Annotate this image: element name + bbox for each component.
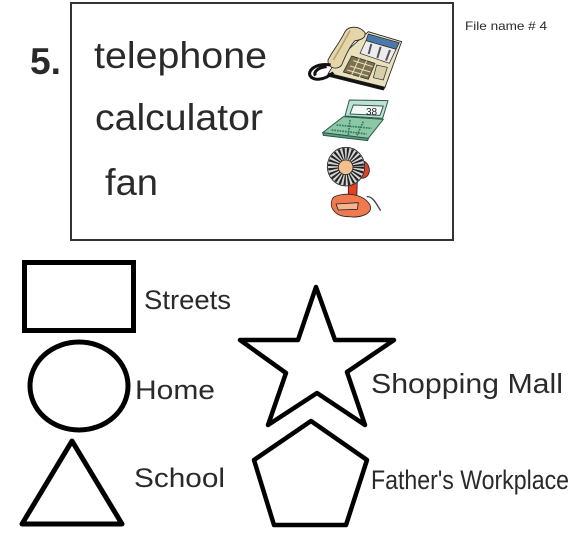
icon: calculator: 38	[366, 107, 378, 118]
shape: rectangle	[24, 262, 134, 330]
question number: 5.	[30, 41, 61, 82]
word: calculator: calculator	[95, 97, 263, 138]
word: fan: fan	[105, 162, 158, 203]
legend: father's workplace	[254, 421, 569, 525]
legend: streets	[24, 262, 231, 330]
file name note: File name # 4	[465, 19, 547, 33]
legend: school	[22, 441, 225, 524]
word: telephone: telephone	[94, 35, 267, 76]
icon: telephone	[310, 27, 402, 90]
telephone cord	[310, 65, 333, 79]
legend: home	[30, 342, 215, 430]
icon: calculator	[323, 100, 388, 141]
label: School: School	[134, 463, 225, 493]
shape: circle	[30, 342, 128, 430]
shape: triangle	[22, 441, 122, 524]
label: Home: Home	[135, 375, 215, 405]
icon: fan	[327, 147, 381, 217]
legend: shopping mall	[240, 287, 563, 425]
shape: pentagon	[254, 421, 367, 525]
label: Streets: Streets	[144, 285, 231, 315]
shape: star	[240, 287, 394, 425]
panel: word and picture box	[71, 3, 453, 240]
label: Shopping Mall: Shopping Mall	[371, 368, 563, 399]
